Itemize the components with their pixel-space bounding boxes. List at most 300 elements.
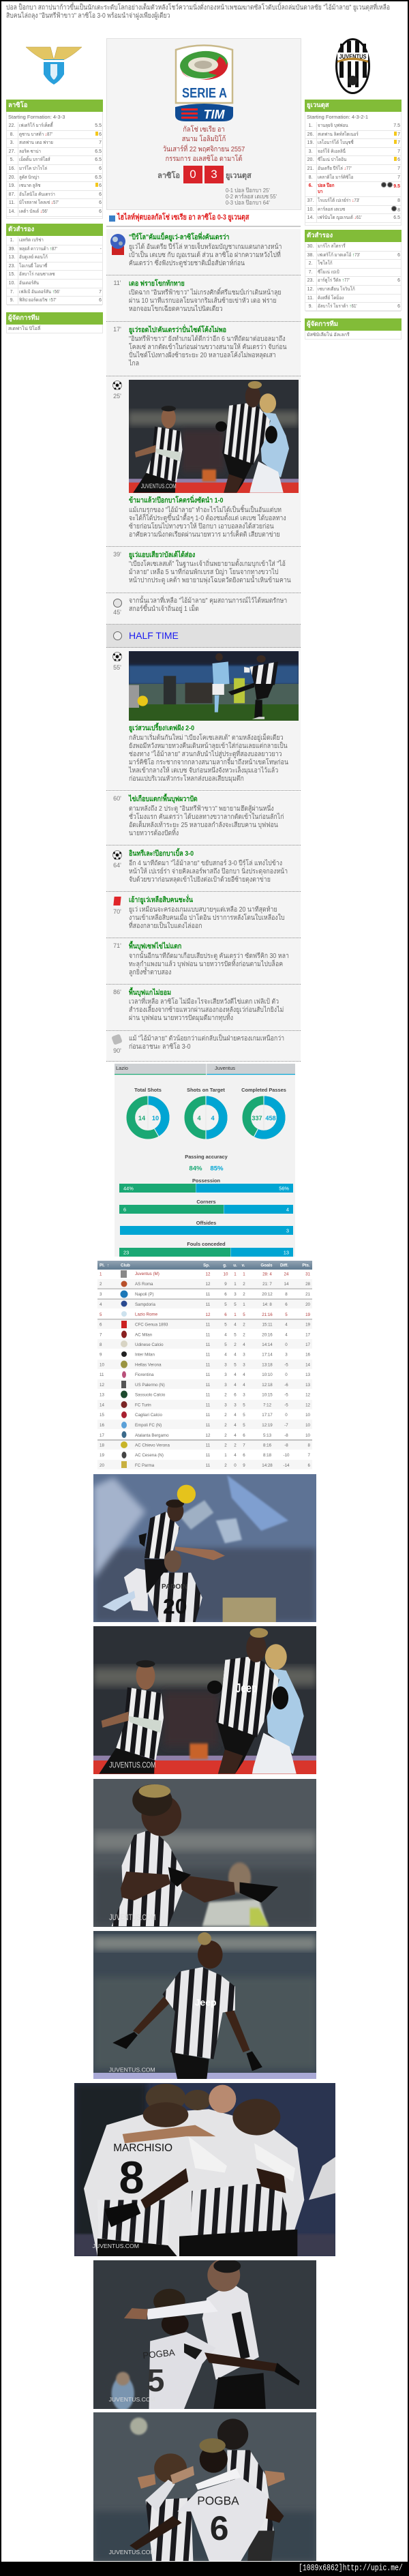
table rows: FC Turin	[135, 1403, 151, 1407]
panel: Juventus substitutes: 2.	[309, 261, 312, 266]
text	[128, 335, 286, 368]
table rows: 11	[206, 1323, 211, 1327]
photo: Tevez shot	[129, 651, 299, 721]
table rows: 12	[206, 1433, 211, 1438]
rule	[106, 226, 301, 227]
heading: Juventus manager	[305, 318, 402, 331]
panel: Juventus starting lineup: 6	[397, 158, 400, 162]
table rows: 13	[100, 1392, 104, 1398]
table rows: 0	[285, 1373, 288, 1377]
table rows: 6	[234, 1392, 237, 1398]
table rows: 8	[308, 1443, 311, 1448]
table rows: 1	[224, 1453, 227, 1458]
heading: Juventus manager: ผู้จัดการทีม	[307, 320, 338, 328]
icon: Juventus crest	[335, 38, 370, 94]
heading: Lazio subs	[6, 224, 103, 236]
panel: Juventus starting lineup: จานลุยจิ บุฟฟอน	[318, 123, 348, 128]
table rows: 9	[224, 1282, 227, 1287]
panel: Lazio starting lineup: 8.	[10, 132, 14, 137]
table rows: 2	[234, 1343, 237, 1347]
photo: Pogba and Vidal run: Jeep	[236, 1681, 257, 1696]
panel: Lazio starting lineup: 19.	[9, 183, 15, 188]
heading: Lazio	[6, 100, 103, 112]
table rows: 17	[305, 1343, 311, 1347]
table rows: -6	[284, 1383, 288, 1388]
match details: สนาม โอลิมปิโก้	[182, 135, 226, 143]
score home: 0	[190, 168, 196, 181]
donut: total shots: Total Shots	[134, 1087, 162, 1093]
panel: Lazio substitutes: 39.	[9, 247, 15, 252]
table rows: 3	[234, 1403, 237, 1407]
table rows: 14:28	[262, 1463, 273, 1468]
minute: 70'	[113, 908, 121, 915]
photo: Pogba heading the ball: 20	[163, 1593, 187, 1618]
donut: completed passes: Completed Passes	[241, 1087, 286, 1093]
table rows: -14	[284, 1463, 290, 1468]
event: 60 min	[106, 792, 301, 845]
table rows: Lazio Rome	[135, 1312, 158, 1317]
bar: corners: 6	[123, 1207, 126, 1212]
text: งานเข้าเหลือสิบคนเมื่อ ปาโดอิน ปราการหลังโดนใบเหลืองใบ	[129, 914, 285, 922]
panel: Lazio starting lineup: มาร์โค ปาโรโล่	[19, 166, 47, 171]
photo: Tevez hugging Pogba	[93, 2260, 316, 2409]
panel: Juventus substitutes: อัลบาโร่ โมราต้า ↑61'	[318, 304, 357, 309]
score away	[204, 166, 224, 183]
panel: Juventus starting lineup: 10.	[307, 207, 314, 212]
table rows: 1	[243, 1272, 245, 1276]
event: 55 min goal	[106, 648, 301, 791]
panel: Lazio substitutes: 15.	[9, 272, 15, 277]
panel: Juventus starting lineup: 6.	[309, 183, 312, 188]
table rows: 11	[206, 1403, 211, 1407]
panel: Lazio starting lineup: 20.	[9, 175, 15, 180]
table rows: 3	[224, 1362, 227, 1368]
text: หอกจอมโขกเฉียดคานบนไปนิดเดียว	[129, 305, 223, 313]
table rows: 5	[100, 1313, 102, 1317]
table rows: 11	[206, 1343, 211, 1347]
text	[129, 905, 285, 930]
table header: ↑	[107, 1263, 109, 1268]
donut: shots on target	[187, 1087, 225, 1139]
panel: Juventus substitutes: 7.	[309, 270, 312, 275]
panel: Juventus starting lineup	[305, 100, 402, 226]
panel: Juventus starting lineup: 7	[397, 149, 400, 154]
text: หน้าให้ เปเรย์ร่า จ่ายคิลเลอร์พาสถึง ป๊อกบา นิ่งประดุจกองหน้า	[129, 868, 288, 875]
table rows: 3	[243, 1362, 245, 1368]
table rows: 16	[305, 1353, 311, 1357]
heading: Juventus	[305, 100, 402, 112]
panel: Lazio starting lineup: เคต้า บัลเด้ ↓56'	[19, 209, 48, 214]
heading: Lazio manager: ผู้จัดการทีม	[8, 314, 40, 322]
panel: Juventus substitutes: 9.	[309, 304, 312, 309]
panel: Juventus substitutes: 11.	[307, 296, 314, 301]
page frame: right border	[408, 0, 409, 2576]
table rows: 2	[224, 1463, 227, 1468]
table header	[97, 1261, 312, 1270]
text: จะได้ก็ได้ประตูขึ้นนำดื้อๆ 1-0 ต้องชมตั้งแต่ เตเบซ ได้บอลทาง	[129, 515, 286, 522]
table rows: 12	[100, 1383, 104, 1388]
table rows: -5	[284, 1403, 288, 1407]
table rows: 3	[243, 1353, 245, 1357]
panel: Juventus starting lineup: 7	[397, 175, 400, 180]
table rows: 4	[285, 1323, 288, 1327]
panel: Juventus starting lineup: อันเดรีย ปีร์โล่ ↓77'	[318, 166, 352, 171]
panel: Juventus substitutes: 6	[397, 278, 400, 283]
panel: Lazio substitutes: 6	[99, 298, 102, 303]
panel: Juventus starting lineup: 7	[397, 140, 400, 145]
text: ผ่าน 10 นาทีแรกบอลโยนจากริมเส้นซ้ายเข่าหัว เดอ ฟราย	[129, 297, 277, 305]
event: 25 min goal	[106, 376, 301, 547]
panel: Lazio starting lineup: 16.	[9, 166, 15, 171]
score away: 3	[211, 168, 217, 181]
panel: match statistics: Lazio	[116, 1065, 128, 1071]
bar: fouls conceded: 23	[123, 1249, 129, 1256]
panel: Lazio starting lineup: อันโตนิโอ คันเดรว่า	[19, 192, 55, 197]
minute: 17'	[113, 326, 121, 333]
panel: Lazio starting lineup: ลูคัส บิกญ่า	[19, 175, 40, 180]
minute: 11'	[113, 280, 121, 286]
table rows: 11	[206, 1392, 211, 1398]
panel: Juventus starting lineup: 21.	[307, 166, 314, 171]
panel: Juventus starting lineup: 7	[397, 166, 400, 171]
table rows: 4	[285, 1332, 288, 1338]
heading: Lazio subs: ตัวสำรอง	[8, 226, 34, 233]
table rows: 17:14	[262, 1353, 273, 1357]
table rows: AC Chievo Verona	[135, 1443, 170, 1448]
table rows: Cagliari Calcio	[135, 1413, 162, 1418]
table rows: 20:12	[262, 1292, 273, 1297]
table rows: 12:18	[262, 1383, 273, 1388]
table rows: 1	[234, 1282, 237, 1287]
table header: u.	[233, 1263, 237, 1268]
text: เวลาที่เหลือ ลาซิโอ ไม่มีอะไรจะเสียหวังดีไข่แตก เฟลิเป้ ตัว	[129, 998, 279, 1006]
table rows	[100, 1270, 311, 1468]
minute: 39'	[113, 551, 121, 558]
table rows: 11	[100, 1373, 104, 1377]
table rows: 3	[243, 1392, 245, 1398]
panel: Lazio substitutes: โอเกนยี่ โอนาซี่	[19, 264, 47, 269]
text: แม้เกมรุกของ "ไอ้ม้าลาย" ทำอะไรไม่ได้เป็นชิ้นเป็นอันแต่บท	[129, 507, 282, 514]
table rows: 10	[100, 1362, 104, 1368]
photo: Tevez hugging Pogba: JUVENTUS.COM	[109, 2396, 155, 2403]
table rows: 17:17	[262, 1413, 273, 1418]
photo: Pogba, Tevez and Marchisio: POGBA	[197, 2493, 239, 2507]
goal list: 0-3 ปอล ป๊อกบา 64'	[226, 199, 270, 206]
table rows: 15	[100, 1413, 104, 1418]
panel: Lazio starting lineup: มิโรสลาฟ โคลเซ่ ↓57'	[19, 200, 59, 205]
table rows: Empoli FC (N)	[135, 1423, 162, 1428]
table rows: 28	[305, 1282, 311, 1287]
table rows: 14	[284, 1282, 289, 1287]
table rows: 11	[206, 1302, 211, 1307]
table rows: -8	[284, 1443, 288, 1448]
panel: Lazio substitutes	[6, 224, 103, 305]
icon: Lazio crest	[26, 46, 82, 85]
text: กลับมาเริ่มต้นกันใหม่ "เบียงโคเซเลสเต้" ตามหลังอยู่เม็ดเดียว	[129, 734, 284, 742]
photo: Pogba, Tevez and Marchisio: 6	[210, 2509, 229, 2547]
table header: v.	[242, 1263, 245, 1268]
text: ที่สองกลายเป็นใบแดงไล่ออก	[129, 923, 202, 930]
table rows: 14	[100, 1403, 104, 1407]
table rows: Inter Milan	[135, 1353, 155, 1357]
panel: Juventus starting lineup: 8.	[309, 175, 312, 180]
table rows: 14: 8	[262, 1302, 272, 1307]
panel: Lazio starting lineup: 3.	[10, 140, 14, 145]
text: ก่อนเอาชนะ ลาซิโอ 3-0	[129, 1043, 191, 1051]
event: pre-match	[106, 229, 301, 275]
panel: Lazio starting lineup: ลอริค ซาน่า	[19, 149, 41, 154]
text	[129, 287, 281, 313]
panel: Lazio starting lineup	[6, 100, 103, 219]
table rows: 11	[206, 1443, 211, 1448]
text: เปิดฉาก "อินทรีฟ้าขาว" ไม่เกรงศักดิ์ศรีแชมป์เก่าเดินหน้าลุย	[129, 289, 281, 297]
photo: Pogba heading the ball: PADOIN	[162, 1583, 187, 1591]
table rows: 0	[285, 1343, 288, 1347]
text: ซ้ายก่อนโยนไปทางขวาให้ ป๊อกบา เอาบอลลงได้สวยก่อน	[129, 523, 274, 530]
panel: Juventus substitutes: 6	[397, 304, 400, 309]
panel: Lazio substitutes: 7	[99, 290, 102, 295]
text: อีก 4 นาทีถัดมา "ไอ้ม้าลาย" ขยับสกอร์ 3-0 ปีร์โล่ แทงไปข้าง	[129, 860, 282, 867]
title: เดอ ฟรายโขกทักทาย	[129, 280, 185, 288]
panel: Lazio substitutes: อับดูเลย์ คอนโก้	[19, 255, 48, 260]
photo: team huddle: MARCHISIO	[113, 2142, 172, 2154]
title: เอ้า!ยูเว่เหลือสิบคนชะงั่น	[129, 896, 193, 904]
table rows: 6	[243, 1453, 245, 1458]
panel: Juventus starting lineup: 8	[397, 208, 400, 213]
panel: Lazio starting lineup: 5.	[10, 158, 14, 162]
title: ไข่เกือบแตก!พื้นบุฟผวาปัด	[129, 795, 198, 803]
panel: Lazio starting lineup: 11.	[9, 200, 15, 205]
event: 86 min	[106, 985, 301, 1031]
panel: Juventus starting lineup: คาร์ลอส เตเบซ	[318, 207, 345, 212]
donut: shots on target: 4	[197, 1115, 201, 1122]
icon: video	[109, 215, 115, 222]
bar: offsides: 3	[286, 1227, 289, 1234]
event: 64 min goal	[106, 845, 301, 892]
text: หน้าปากประตู เคต้า พยายามพุ่งโฉบตวัดยิงตามน้ำเหินข้ามคาน	[129, 577, 291, 584]
title: "ปีร์โล"คัมแบ็คยูเว่-ลาซิโอพึ่งคันเดรว่า	[129, 233, 229, 241]
panel: Juventus substitutes: โซโลโก้	[318, 261, 333, 266]
text: ลูกยิงซ้ำตาบสอง	[129, 969, 171, 976]
table rows: 2	[224, 1413, 227, 1418]
panel: Lazio starting lineup: 6	[99, 166, 102, 171]
table rows: 2	[224, 1443, 227, 1448]
text	[129, 505, 286, 539]
manager name: สเตฟาโน่ ปิโอลี่	[8, 327, 40, 331]
table rows: 11	[206, 1383, 211, 1388]
table rows: 21:16	[262, 1313, 273, 1317]
panel: Juventus starting lineup: 37.	[307, 198, 314, 203]
panel: Juventus starting lineup: 14.	[307, 215, 314, 220]
heading: Lazio manager	[6, 312, 103, 325]
goal list: 0-1 ปอล ป๊อกบา 25'	[226, 187, 270, 194]
panel: Juventus starting lineup: 3.	[309, 149, 312, 154]
minute: 60'	[113, 795, 121, 802]
table rows: 5	[285, 1313, 288, 1317]
table rows: Sampdoria	[135, 1302, 155, 1307]
table header: Sp.	[203, 1263, 210, 1268]
table rows: AC Milan	[135, 1332, 153, 1338]
table rows: -8	[284, 1433, 288, 1438]
panel: Lazio starting lineup: 6.5	[95, 175, 102, 180]
panel: Juventus starting lineup: 26.	[307, 132, 314, 137]
text: ผ่าน บุฟฟอน นายทวารปัดมุมดีมากทุบทิ้ง	[129, 1015, 233, 1022]
panel: Lazio substitutes: 1.	[10, 238, 14, 243]
table rows: 11	[206, 1423, 211, 1428]
table rows: 2	[234, 1443, 237, 1448]
goal list: 0-2 คาร์ลอส เตเบซ 55'	[226, 193, 277, 200]
table rows: 5	[243, 1423, 245, 1428]
table rows: 5	[234, 1332, 237, 1338]
text: โคลเซ่ ลากตัดเข้าในก่อนผ่านขวางสนามให้ คันเดรว่า จับก่อน	[129, 344, 286, 351]
table rows: 5	[224, 1323, 227, 1327]
half time bar	[106, 625, 301, 648]
text: ช่องทาง "ไอ้ม้าลาย" สวนกลับนำไปสู่ประตูที่สองบอลยาวยาว	[129, 751, 282, 758]
table rows: 6	[285, 1302, 288, 1307]
text: จากนั้นอีกนาทีถัดมาเกือบเสียประตู คันเดรว่า ซัดฟรีคิก 30 หลา	[129, 953, 289, 960]
table rows: 28: 4	[262, 1272, 272, 1276]
table header: Pts.	[302, 1263, 310, 1268]
icon: clock	[113, 631, 122, 640]
text: ยูเว่ เหมือนจะครองเกมแบบสบายๆแต่เหลือ 20 นาทีสุดท้าย	[129, 906, 277, 914]
table rows: Udinese Calcio	[135, 1343, 164, 1347]
table rows: 8:18	[263, 1453, 272, 1458]
manager name: มัสซิมิเลียโน่ อัลเลกรี	[307, 333, 350, 338]
text: ยูเว่ได้ อันเดรีย ปีร์โล่ หายเจ็บพร้อมบัญชาเกมแดนกลางหน้า	[129, 243, 282, 251]
title: อินทรีเละ!ป๊อกบาเบิ้ล 3-0	[129, 850, 194, 858]
table rows: 5	[234, 1302, 237, 1307]
table rows: 4	[224, 1353, 227, 1357]
table rows: 3	[224, 1403, 227, 1407]
match details	[163, 125, 245, 163]
icon: ball	[112, 652, 122, 661]
event: 11 min	[106, 275, 301, 322]
panel: Lazio starting lineup: 6.5	[95, 149, 102, 154]
bar: corners: Corners	[196, 1199, 216, 1205]
panel: Lazio starting lineup: ดูซาน บาสต้า ↓87'	[19, 132, 52, 137]
table rows: 17	[100, 1433, 104, 1438]
photo: Pogba pointing: JUVENTUS.COM	[109, 1914, 155, 1923]
table rows: 6	[308, 1463, 311, 1468]
table header: g.	[223, 1263, 227, 1268]
panel: Lazio substitutes: ฟิลิป ยอร์ดเยวิช ↑57'	[19, 298, 57, 303]
table rows: 13	[305, 1383, 311, 1388]
event: 17 min	[106, 322, 301, 376]
donut: total shots	[131, 1087, 165, 1136]
photo: Tevez hugging Pogba: 5	[147, 2363, 164, 2398]
table rows: 4	[234, 1323, 237, 1327]
table rows: 5	[224, 1302, 227, 1307]
table rows: 3	[234, 1292, 237, 1297]
heading: Juventus: ยูเวนตุส	[307, 102, 329, 109]
minute: 86'	[113, 989, 121, 995]
table rows: 6	[224, 1313, 227, 1317]
table rows: 4	[100, 1302, 102, 1307]
table rows: 12	[206, 1282, 211, 1287]
panel: Lazio starting lineup: สเตฟาน เดอ ฟราย	[19, 140, 53, 145]
title: ข้ามาแล้ว!ป๊อกบาโคตรนิ่งซัดนำ 1-0	[129, 496, 223, 505]
text: สกอร์ขึ้นนำเจ้าถิ่นอยู่ 1 เม็ด	[129, 605, 199, 613]
table rows: 21: 7	[262, 1282, 272, 1287]
minute: 25'	[113, 393, 121, 400]
table rows: Fiorentina	[135, 1373, 154, 1377]
table rows: 12:19	[262, 1423, 273, 1428]
bar: fouls conceded	[119, 1241, 293, 1257]
panel: Lazio substitutes: 10.	[9, 281, 15, 286]
table rows: 4	[234, 1423, 237, 1428]
minute: 55'	[113, 664, 121, 671]
table rows: 9	[243, 1463, 245, 1468]
title: ยูเว่สวนเปรี้ยง!เตฟฝัง 2-0	[129, 724, 194, 732]
table rows: 11	[206, 1453, 211, 1458]
photo: Tevez hugging Pogba: POGBA	[142, 2347, 175, 2361]
text	[129, 950, 289, 976]
panel: Lazio starting lineup: 6	[99, 192, 102, 197]
panel: Lazio starting lineup: 6	[99, 132, 102, 137]
table rows: 4	[243, 1373, 245, 1377]
formation: Starting Formation: 4-3-3	[8, 114, 65, 120]
match details: กรรมการ อเลสซิโอ ดามาโต้	[166, 155, 242, 163]
table rows: 4	[234, 1453, 237, 1458]
table rows: Napoli (P)	[135, 1292, 154, 1297]
page frame: left border	[0, 0, 1, 2576]
title: พื้นบุฟแกไม่ยอม	[129, 989, 171, 997]
table rows: US Palermo (N)	[135, 1383, 165, 1388]
home team name: ลาซิโอ	[157, 172, 180, 180]
text: ชั่วโมงแรก คันเดรว่า ได้บอลทางขวาลากตัดเข้าในก่อนลักไก่	[129, 813, 284, 821]
panel: Juventus substitutes: เฟเดริโก้ มาตเตโอ้ ↑73'	[318, 253, 360, 258]
section title: ไฮไลท์ฟุตบอลกัลโช่ เซเรีย อา ลาซิโอ 0-3 ยูเวนตุส	[117, 213, 249, 222]
table rows: 5	[234, 1362, 237, 1368]
text: จับด้วยขวาก่อนหลุดเข้าไปยิงต่อเป้าด้วยอีซ้ายตุงตาข่าย	[129, 876, 271, 884]
table rows: 20	[305, 1302, 311, 1307]
event: 45 min	[106, 593, 301, 625]
table rows: 10:15	[262, 1392, 273, 1398]
donut: shots on target: Shots on Target	[187, 1087, 225, 1093]
text: "อินทรีฟ้าขาว" ยังทำเกมได้ดีกว่าอีก 6 นาทีถัดมาต่อบอลมาถึง	[129, 335, 286, 343]
table rows: 2	[243, 1282, 245, 1287]
score home	[183, 166, 202, 183]
table rows: 1	[234, 1313, 237, 1317]
table rows: 6	[224, 1292, 227, 1297]
photo: Pogba, Tevez and Marchisio	[93, 2412, 316, 2561]
photo: Pogba celebrating: JUVENTUS.COM	[109, 2066, 155, 2073]
panel: Juventus substitutes: ซีโมเน่ เปเป้	[318, 270, 339, 275]
table rows: Sassuolo Calcio	[135, 1392, 166, 1398]
panel: Lazio starting lineup: 87.	[9, 192, 15, 197]
text	[128, 732, 288, 783]
table rows: 8:16	[263, 1443, 272, 1448]
text: ยังพอมีหวังหมายทวงคืนเดินหน้าลุยเข้าใส่ก่อนเลยแต่กลายเป็น	[129, 743, 288, 750]
photo: Pogba pointing	[93, 1779, 316, 1927]
photo: Pogba, Tevez and Marchisio: JUVENTUS.COM	[109, 2549, 155, 2556]
table rows: AS Roma	[135, 1282, 153, 1287]
panel: Lazio substitutes: 23.	[9, 264, 15, 269]
text: อาศัยความนิ่งกดเรียดผ่านนายทวาร มาร์เค็ตติ เสียบตาข่าย	[129, 531, 280, 539]
text	[129, 1034, 284, 1051]
text	[129, 559, 291, 584]
panel: Lazio manager	[6, 312, 103, 333]
table rows: 19	[305, 1313, 311, 1317]
panel: Juventus manager	[305, 318, 402, 340]
text: จากนั้นเวลาที่เหลือ "ไอ้ม้าลาย" คุมสถานการณ์ไว้ได้หมดรักษา	[129, 597, 287, 605]
table rows: 4	[243, 1343, 245, 1347]
panel: Lazio starting lineup: 14.	[9, 209, 15, 214]
match details: วันเสาร์ที่ 22 พฤศจิกายน 2557	[163, 145, 245, 153]
text: แม้ "ไอ้ม้าลาย" ตัวน้อยกว่าแต่กลับเป็นฝ่ายครองเกมเหนือกว่า	[129, 1035, 284, 1043]
table rows: 3	[224, 1383, 227, 1388]
panel: Juventus starting lineup: 20.	[307, 158, 314, 162]
